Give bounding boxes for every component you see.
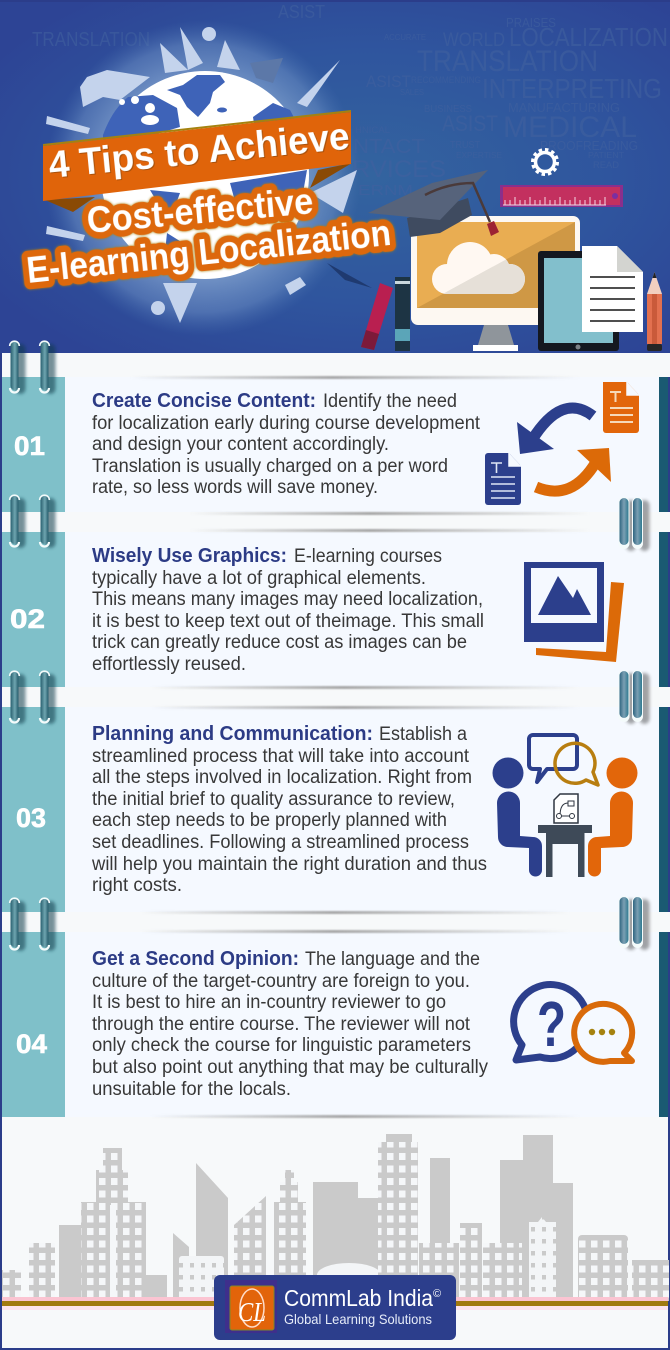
tip 4 text: It is best to hire an in-country reviewer to go bbox=[92, 992, 446, 1013]
word cloud background: RVICES bbox=[352, 156, 446, 183]
logo mark bbox=[225, 1280, 277, 1333]
word cloud background: BUSINESS bbox=[424, 104, 472, 115]
word cloud background: HNICAL bbox=[355, 125, 390, 135]
word cloud background: READ bbox=[593, 160, 620, 170]
word cloud background: ASIST bbox=[366, 72, 411, 91]
logo mark: CL bbox=[238, 1297, 266, 1327]
ruler bbox=[500, 185, 623, 207]
tip 3 text bbox=[91, 723, 487, 896]
binder rings right bbox=[618, 497, 650, 950]
tip 4 text bbox=[92, 948, 488, 1100]
word cloud background: TRANSLATION bbox=[417, 45, 598, 78]
word cloud background: PRAISES bbox=[506, 15, 556, 30]
tip 3 text: will help you maintain the right duration and thus bbox=[91, 854, 487, 875]
word cloud background: WORLD bbox=[443, 30, 505, 51]
graduation cap bbox=[368, 170, 499, 237]
tip 1 text bbox=[92, 390, 481, 498]
continents bbox=[103, 75, 307, 262]
title line 2: Cost-effective bbox=[85, 180, 315, 241]
word cloud background: EXPERTISE bbox=[456, 151, 502, 160]
tip 1 text: Identify the need bbox=[323, 391, 457, 412]
word cloud background: PATIENT bbox=[588, 151, 624, 160]
logo text bbox=[284, 1285, 441, 1327]
tip 2 text bbox=[92, 545, 484, 675]
tip 2 text: typically have a lot of graphical elements. bbox=[92, 568, 426, 589]
CommLab India logo badge bbox=[214, 1275, 456, 1340]
number 02: 02 bbox=[10, 604, 45, 634]
tip 3 text: set deadlines. Following a streamlined process bbox=[92, 832, 469, 853]
title line 1: 4 Tips to Achieve bbox=[47, 116, 351, 187]
tip 4 text: unsuitable for the locals. bbox=[92, 1079, 291, 1100]
number 04: 04 bbox=[16, 1029, 47, 1059]
tip 3 text: Planning and Communication: bbox=[92, 723, 373, 745]
tip 2 text: Wisely Use Graphics: bbox=[92, 545, 287, 567]
ground line bbox=[2, 1297, 668, 1310]
binder rings left bbox=[10, 342, 56, 951]
left and right page borders bbox=[0, 353, 670, 1350]
tip 1 text: and design your content accordingly. bbox=[92, 434, 389, 455]
tip 4 text: Get a Second Opinion: bbox=[92, 948, 299, 970]
word cloud background: TRANSLATION bbox=[32, 29, 150, 51]
icon: document swap arrows bbox=[485, 382, 639, 505]
tip 2 text: This means many images may need localization, bbox=[92, 589, 483, 610]
icon: two people talking at a desk bbox=[492, 735, 638, 877]
icon: picture frame bbox=[524, 562, 624, 662]
tip 3 text: the initial brief to quality assurance to review, bbox=[92, 789, 455, 810]
word cloud background: TRUST bbox=[450, 140, 480, 151]
tip 4 text: but also point out anything that may be culturally bbox=[92, 1057, 488, 1078]
logo text: CommLab India bbox=[284, 1285, 433, 1311]
icon: question and answer bubbles bbox=[514, 985, 632, 1062]
word cloud background: SALES bbox=[400, 88, 424, 97]
word cloud background bbox=[32, 2, 668, 199]
title ribbon bbox=[43, 110, 352, 212]
word cloud background: RECOMMENDING bbox=[411, 75, 481, 85]
icon: question and answer bubbles: ? bbox=[537, 988, 566, 1060]
tip 2 text: E-learning courses bbox=[294, 546, 442, 567]
logo text: Global Learning Solutions bbox=[284, 1311, 432, 1327]
panel: tip 3 bbox=[0, 707, 670, 912]
tip 1 text: Create Concise Content: bbox=[92, 390, 316, 412]
tablet bbox=[538, 251, 619, 351]
desktop monitor with cloud bbox=[411, 216, 580, 351]
pencil bbox=[647, 272, 662, 351]
word cloud background: NTACT bbox=[353, 136, 425, 158]
tip 3 text: right costs. bbox=[92, 875, 182, 896]
tip 1 text: Translation is usually charged on a per word bbox=[92, 456, 448, 477]
title line 3: E-learning Localization bbox=[25, 212, 393, 291]
tip 3 text: all the steps involved in localization. Right from bbox=[92, 767, 472, 788]
document bbox=[582, 246, 643, 332]
tip 3 text: Establish a bbox=[379, 724, 467, 745]
word cloud background: ASIST bbox=[278, 2, 325, 22]
tip 1 text: rate, so less words will save money. bbox=[92, 477, 378, 498]
tip 4 text: culture of the target-country are foreign to you. bbox=[92, 971, 470, 992]
city skyline bbox=[2, 1134, 669, 1301]
number 03: 03 bbox=[16, 803, 46, 833]
tip 4 text: The language and the bbox=[305, 949, 480, 970]
word cloud background: ASIST bbox=[442, 111, 498, 136]
globe illustration bbox=[45, 20, 372, 336]
tip 2 text: trick can greatly reduce cost as images can be bbox=[92, 632, 467, 653]
tip 1 text: for localization early during course development bbox=[92, 413, 481, 434]
tip 4 text: only check the course for linguistic parameters bbox=[92, 1035, 471, 1056]
tip 4 text: through the entire course. The reviewer will not bbox=[92, 1014, 471, 1035]
tip 3 text: each step needs to be properly planned with bbox=[92, 810, 447, 831]
word cloud background: MANUFACTURING bbox=[508, 100, 620, 115]
panel: tip 2 bbox=[0, 532, 670, 687]
tip 2 text: it is best to keep text out of theimage. This small bbox=[92, 611, 484, 632]
tip 2 text: effortlessly reused. bbox=[92, 654, 246, 675]
tip 3 text: streamlined process that will take into account bbox=[92, 746, 470, 767]
panel: tip 4 bbox=[0, 932, 670, 1117]
books bbox=[361, 277, 410, 351]
number 01: 01 bbox=[14, 431, 45, 461]
word cloud background: MEDICAL bbox=[503, 111, 637, 144]
landmark spikes around globe bbox=[46, 27, 372, 323]
word cloud background: PROOFREADING bbox=[540, 138, 638, 153]
header panel bbox=[0, 0, 670, 353]
word cloud background: ACCURATE bbox=[384, 33, 426, 42]
card shadows bbox=[140, 512, 590, 1118]
logo text: © bbox=[433, 1288, 441, 1300]
gear icon bbox=[532, 150, 558, 174]
panel: tip 1 bbox=[0, 376, 670, 512]
word cloud background: ERNM bbox=[358, 182, 413, 199]
